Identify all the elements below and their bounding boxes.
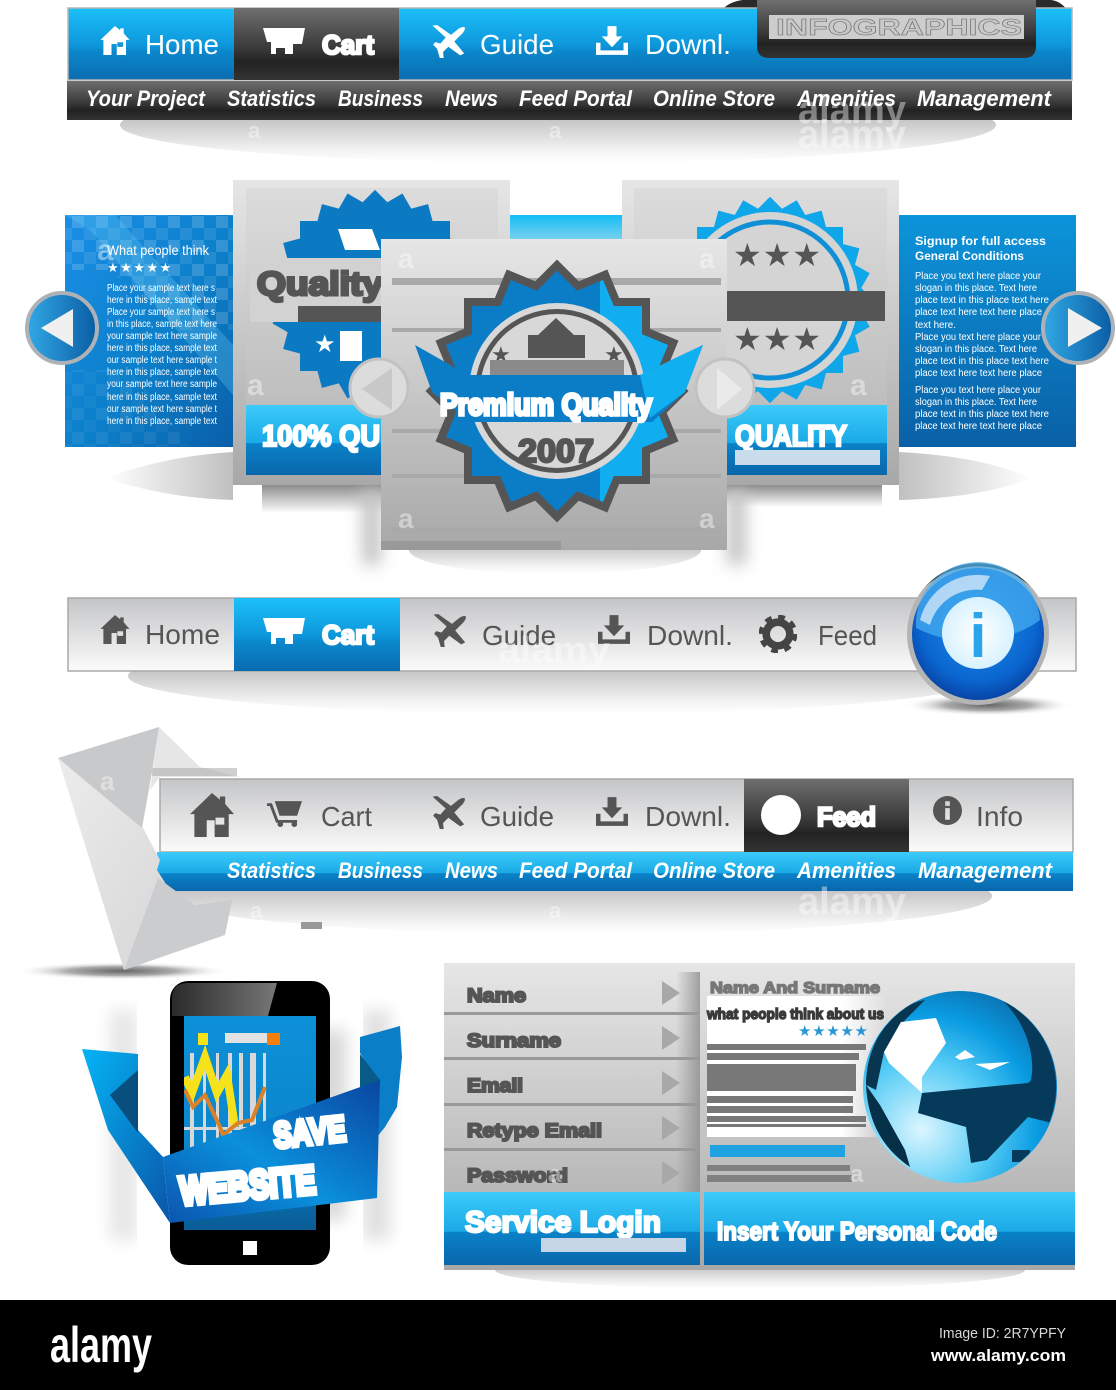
center seal <box>415 259 703 523</box>
sub menu labels: Online Store <box>653 86 775 111</box>
panel: signup: slogan in this place. Text here <box>915 344 1037 355</box>
right band text: QUALITY <box>735 420 847 453</box>
sample text: your sample text here sample <box>107 379 217 390</box>
info orb: i <box>969 602 987 671</box>
ribbon text: SAVE <box>272 1108 347 1156</box>
label: download: Downl. <box>645 29 731 60</box>
panel: signup: General Conditions <box>915 249 1024 263</box>
label: cart: Cart <box>322 620 374 650</box>
middle blue strip <box>510 215 623 241</box>
sub menu labels: Your Project <box>86 86 207 111</box>
sub menu labels: Business <box>338 858 423 883</box>
left dark limb <box>866 1085 910 1167</box>
left band text: 100% QU <box>262 420 380 453</box>
sub menu labels: Online Store <box>653 858 775 883</box>
top rim <box>866 1000 925 1090</box>
form rows <box>444 981 699 1187</box>
left seal: Quality <box>257 265 384 302</box>
panel: what people think <box>65 215 233 447</box>
watermarks: alamy <box>798 88 907 132</box>
envelope <box>14 727 240 980</box>
right band <box>634 405 887 475</box>
sample text: here in this place, sample text <box>107 367 217 378</box>
card: center <box>381 239 727 550</box>
watermarks: a <box>850 369 867 402</box>
panel: signup: place text here text here place <box>915 368 1042 379</box>
login panel <box>444 963 1075 1289</box>
big prev arrow <box>27 293 97 363</box>
panel shadow <box>495 1251 1025 1289</box>
carousel <box>27 180 1113 574</box>
active cart tab <box>234 8 399 80</box>
watermarks: a <box>548 1161 562 1188</box>
phone screen <box>184 1016 316 1230</box>
label: info: Info <box>976 801 1023 832</box>
watermarks: a <box>699 243 715 274</box>
service login band <box>444 1192 700 1265</box>
right seal: ★★★ <box>733 237 822 273</box>
panel background <box>444 963 1075 1270</box>
islands <box>955 1050 1010 1070</box>
right fold <box>124 878 232 970</box>
icon: home <box>100 615 130 644</box>
sample text: our sample text here sample t <box>107 355 217 366</box>
sub menu labels: Statistics <box>227 858 316 883</box>
phone glare <box>172 983 277 1016</box>
seal icon <box>528 318 585 358</box>
form rows: Email <box>467 1076 523 1097</box>
personal code band <box>704 1192 1075 1265</box>
seal year: 2007 <box>518 433 594 469</box>
service login label: Service Login <box>465 1206 661 1239</box>
globe <box>863 991 1060 1183</box>
second navigation bar <box>68 562 1076 716</box>
infographics badge <box>757 0 1036 58</box>
info orb <box>903 562 1073 716</box>
right dark limb <box>1003 1001 1056 1099</box>
image id: Image ID: 2R7YPFY <box>939 1325 1066 1342</box>
watermarks: a <box>100 766 115 796</box>
phone promo <box>82 981 402 1288</box>
infographics badge: INFOGRAPHICS <box>776 14 1022 40</box>
sub menu labels <box>86 86 1053 111</box>
blue link <box>710 1145 845 1157</box>
sub menu labels: Feed Portal <box>519 86 633 111</box>
left band <box>246 405 498 475</box>
service login label <box>465 1206 686 1252</box>
dark sub menu <box>67 81 1072 120</box>
gray strip <box>68 598 1076 671</box>
sample text: here in this place, sample text <box>107 295 217 306</box>
fold shadow <box>152 768 237 776</box>
watermarks: a <box>248 118 261 143</box>
icon: plane <box>434 614 466 647</box>
panel: signup: Place you text here place your <box>915 332 1042 343</box>
watermarks: a <box>97 234 114 267</box>
icon: download <box>598 615 630 644</box>
icon: download <box>596 26 628 55</box>
small dash <box>301 922 322 929</box>
panel: signup: place text in this place text here <box>915 409 1049 420</box>
sample text: here in this place, sample text <box>107 392 217 403</box>
sub menu labels: Statistics <box>227 86 316 111</box>
active feed tab <box>744 779 909 852</box>
label: guide: Guide <box>482 620 556 651</box>
ribbon left fold <box>110 1070 138 1133</box>
gray footer lines <box>707 1165 852 1182</box>
carousel shadows <box>106 452 1032 574</box>
left seal <box>250 190 481 402</box>
rating stars: ★★★★★ <box>107 260 173 275</box>
back flap <box>150 727 240 790</box>
form rows: Name <box>467 986 526 1007</box>
watermarks: alamy <box>798 881 906 923</box>
icon: home <box>190 793 234 837</box>
top flap <box>58 727 159 828</box>
sub menu labels: Feed Portal <box>519 858 633 883</box>
sample text: Place your sample text here s <box>107 307 215 318</box>
south america shadow <box>918 1060 1060 1163</box>
label: feed: Feed <box>817 802 876 832</box>
active cart tab <box>234 598 400 671</box>
center seal: ★ <box>604 342 624 367</box>
watermarks: a <box>398 243 414 274</box>
watermarks <box>97 88 907 1188</box>
home button <box>243 1241 257 1255</box>
alamy logo: alamy <box>50 1317 152 1373</box>
panel: signup: Signup for full access <box>915 234 1046 248</box>
panel: signup: Place you text here place your <box>915 271 1042 282</box>
right seal: Seal <box>780 294 825 319</box>
sample text <box>107 283 217 427</box>
form rows: Retype Email <box>467 1121 602 1142</box>
center seal: Premium Quality <box>440 387 653 422</box>
sub menu labels: Business <box>338 86 423 111</box>
gray copy lines <box>707 1044 866 1127</box>
panel: signup: place text here text here place <box>915 307 1042 318</box>
icon: cart blob <box>263 28 305 54</box>
label: home: Home <box>145 619 220 650</box>
watermarks: alamy <box>498 629 610 670</box>
watermarks: alamy <box>798 113 907 157</box>
watermarks: a <box>549 898 562 923</box>
panel: signup: place text in this place text here <box>915 356 1049 367</box>
panel: signup: Place you text here place your <box>915 385 1042 396</box>
sub menu labels <box>227 858 1054 883</box>
form rows: Surname <box>467 1031 561 1052</box>
label: cart: Cart <box>322 30 374 60</box>
sub menu labels: Amenities <box>796 858 896 883</box>
blue menu strip <box>68 8 1072 80</box>
ribbon left tail <box>82 1049 170 1223</box>
sample text: Place your sample text here s <box>107 283 215 294</box>
panel: signup: text here. <box>915 320 956 331</box>
left seal: ★ <box>314 331 336 358</box>
north america <box>884 1018 946 1093</box>
divider lines <box>381 278 721 550</box>
panel: signup: place text here text here place <box>915 421 1042 432</box>
label: guide: Guide <box>480 29 554 60</box>
label: feed: Feed <box>818 620 877 651</box>
paper sheet shadows <box>110 982 390 1288</box>
ribbon right tail <box>360 1026 402 1137</box>
sub menu labels: News <box>445 858 498 883</box>
sample text: your sample text here sample <box>107 331 217 342</box>
heading: What people think <box>107 242 210 258</box>
label: download: Downl. <box>647 620 733 651</box>
sub menu labels: Management <box>917 86 1053 111</box>
watermarks: a <box>250 898 263 923</box>
column heading: Name And Surname <box>710 980 880 997</box>
icon: cart blob <box>263 618 305 644</box>
form rows: Password <box>467 1166 568 1187</box>
watermarks: a <box>549 118 562 143</box>
sample text: here in this place, sample text <box>107 416 217 427</box>
phone body <box>170 981 330 1265</box>
icon: gear <box>761 617 795 651</box>
rating stars: ★★★★★ <box>798 1023 868 1040</box>
right band text <box>735 420 880 465</box>
sub menu labels: Management <box>918 858 1054 883</box>
icon: home <box>100 26 130 55</box>
sample text: our sample text here sample t <box>107 404 217 415</box>
center seal: ★ <box>491 342 511 367</box>
sub menu labels: Amenities <box>796 86 896 111</box>
line chart <box>184 1033 280 1153</box>
small prev arrow <box>350 359 408 417</box>
dark subheading: what people think about us <box>706 1006 884 1023</box>
icon: feed blob <box>761 795 801 835</box>
watermarks: a <box>398 503 414 534</box>
icon: download <box>596 797 628 826</box>
small next arrow <box>696 359 754 417</box>
label: cart: Cart <box>321 801 372 832</box>
card: right <box>622 180 899 485</box>
label: home: Home <box>145 29 219 60</box>
blue sub menu <box>157 852 1073 891</box>
third navigation bar <box>157 779 1073 934</box>
ribbon right fold <box>360 1054 380 1088</box>
panel: signup: slogan in this place. Text here <box>915 283 1037 294</box>
label: guide: Guide <box>480 801 554 832</box>
top navigation bar <box>67 0 1072 163</box>
envelope shadow <box>14 962 230 980</box>
personal code label: Insert Your Personal Code <box>717 1216 997 1246</box>
footer bar <box>0 1300 1116 1390</box>
website: www.alamy.com <box>930 1346 1066 1365</box>
right seal: ★★★ <box>733 321 822 357</box>
shadow <box>168 858 992 934</box>
icon: plane <box>432 25 465 58</box>
icon: info <box>933 796 962 825</box>
ribbon text <box>178 1108 347 1214</box>
left face <box>58 758 195 970</box>
panel: signup: slogan in this place. Text here <box>915 397 1037 408</box>
shadow <box>128 638 992 714</box>
ribbon <box>415 345 703 422</box>
sample text: in this place, sample text here <box>107 319 217 330</box>
icon: plane <box>432 796 465 829</box>
column shade <box>676 972 700 1265</box>
sub menu labels: News <box>445 86 498 111</box>
watermarks: a <box>699 503 715 534</box>
panel: signup: place text in this place text here <box>915 295 1049 306</box>
ribbon main <box>163 1080 380 1223</box>
card: left <box>233 180 510 485</box>
right seal <box>667 197 885 403</box>
ribbon text: WEBSITE <box>178 1158 317 1214</box>
sample text: here in this place, sample text <box>107 343 217 354</box>
watermarks: a <box>247 369 264 402</box>
white text block <box>707 996 887 1137</box>
gray strip <box>160 779 1073 852</box>
label: download: Downl. <box>645 801 731 832</box>
icon: cart <box>267 801 302 827</box>
infographics tab ears <box>720 0 1068 12</box>
big next arrow <box>1043 293 1113 363</box>
shadow under top bar <box>120 87 996 163</box>
watermarks: a <box>850 1161 864 1188</box>
panel: signup <box>899 215 1076 447</box>
